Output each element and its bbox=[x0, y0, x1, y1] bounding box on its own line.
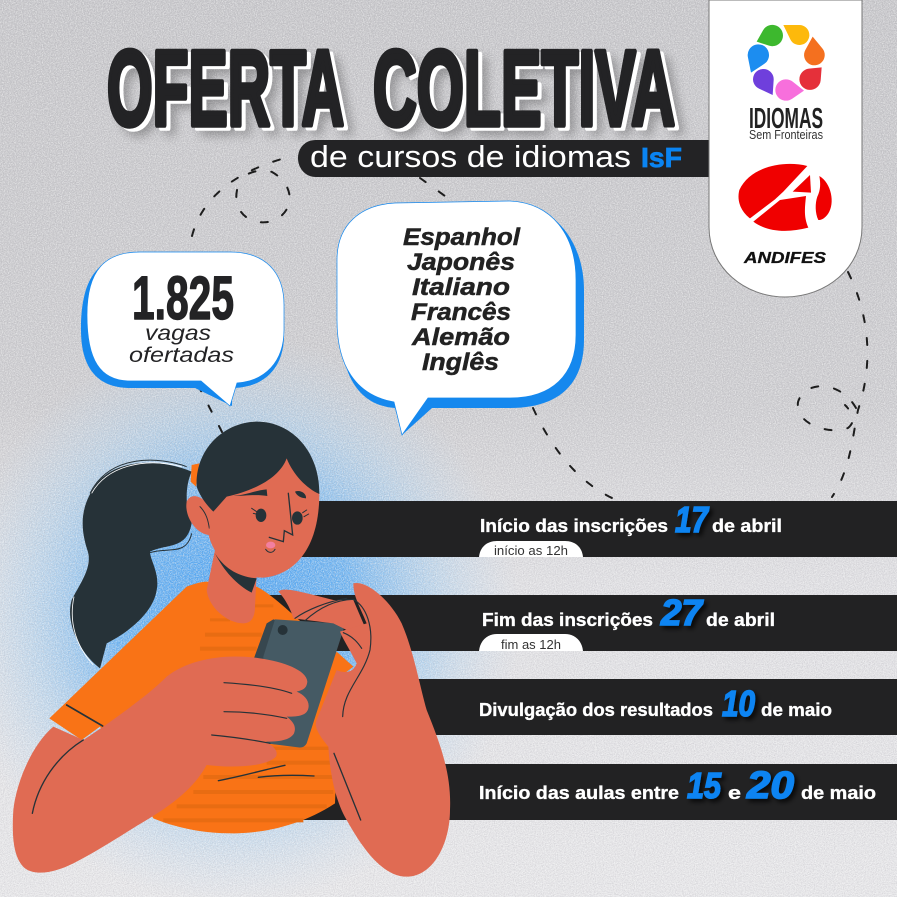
hair tie bbox=[191, 463, 199, 487]
speech bubble: vagas bbox=[81, 252, 284, 406]
row: fim das inscricoes: fim as 12h bbox=[501, 638, 561, 652]
neck bbox=[207, 550, 257, 623]
forearm and hand in front bbox=[13, 657, 314, 873]
label: vagas ofertadas: vagas bbox=[145, 321, 211, 345]
label: vagas ofertadas bbox=[129, 321, 234, 367]
row: inicio das inscricoes: de abril bbox=[712, 516, 782, 536]
row: divulgacao dos resultados: Divulgação dos resultados bbox=[479, 700, 713, 720]
subtitle pill bbox=[298, 139, 712, 177]
logo: idiomas sem fronteiras bbox=[748, 25, 825, 101]
row: fim das inscricoes: Fim das inscrições bbox=[482, 610, 653, 630]
language list bbox=[403, 224, 521, 376]
row: inicio das aulas: de maio bbox=[801, 783, 876, 803]
language list: Espanhol bbox=[403, 224, 521, 251]
title: OFERTA bbox=[107, 28, 344, 148]
ponytail bbox=[70, 460, 192, 668]
row: divulgacao dos resultados: 10 bbox=[722, 683, 755, 724]
row: inicio das inscricoes: Início das inscrições bbox=[480, 516, 668, 536]
row: inicio das inscricoes: início as 12h bbox=[494, 544, 568, 558]
row: fim das inscricoes bbox=[479, 592, 775, 652]
number: 1.825: 1.825 bbox=[132, 264, 234, 332]
title: OFERTA bbox=[116, 36, 353, 156]
row: inicio das aulas bbox=[479, 765, 876, 807]
subtitle pill: de cursos de idiomas bbox=[310, 139, 631, 174]
face bbox=[208, 457, 319, 578]
wordmark: sem fronteiras: Sem Fronteiras bbox=[749, 128, 823, 142]
language list: Francês bbox=[411, 299, 511, 326]
row: divulgacao dos resultados bbox=[479, 683, 832, 724]
wordmark: andifes: ANDIFES bbox=[743, 250, 827, 267]
row: inicio das aulas: Início das aulas entre bbox=[479, 783, 679, 803]
subtitle pill: IsF bbox=[641, 142, 682, 173]
face details bbox=[233, 489, 309, 552]
dashed path lines bbox=[192, 158, 867, 498]
language list: Japonês bbox=[407, 249, 515, 276]
title: COLETIVA bbox=[373, 28, 675, 148]
row: inicio das aulas: 15 bbox=[687, 765, 722, 806]
row: inicio das aulas: e bbox=[728, 783, 741, 803]
title: OFERTA bbox=[111, 31, 348, 151]
row: inicio das aulas: 20 bbox=[746, 765, 794, 807]
row: divulgacao dos resultados: de maio bbox=[761, 700, 832, 720]
row: inicio das inscricoes: 17 bbox=[675, 499, 710, 540]
language list: Italiano bbox=[412, 274, 510, 301]
row: fim das inscricoes: 27 bbox=[660, 592, 704, 633]
title: COLETIVA bbox=[377, 31, 679, 151]
ear bbox=[186, 496, 213, 535]
row: fim das inscricoes: de abril bbox=[706, 610, 775, 630]
illustration: girl with phone bbox=[13, 422, 450, 877]
logo: andifes bbox=[739, 164, 832, 231]
speech bubble: idiomas bbox=[337, 201, 584, 435]
row: inicio das inscricoes bbox=[479, 499, 782, 558]
hand holding phone with thumb bbox=[278, 583, 450, 877]
logo card bbox=[709, 0, 862, 297]
timeline bars bbox=[250, 501, 897, 820]
language list: Inglês bbox=[422, 349, 499, 376]
label: vagas ofertadas: ofertadas bbox=[129, 343, 234, 367]
shirt bbox=[49, 582, 353, 833]
language list: Alemão bbox=[411, 324, 510, 351]
neck shadow bbox=[215, 553, 257, 593]
hair bbox=[197, 422, 319, 512]
phone bbox=[253, 619, 344, 747]
wordmark: idiomas: IDIOMAS bbox=[749, 103, 823, 135]
